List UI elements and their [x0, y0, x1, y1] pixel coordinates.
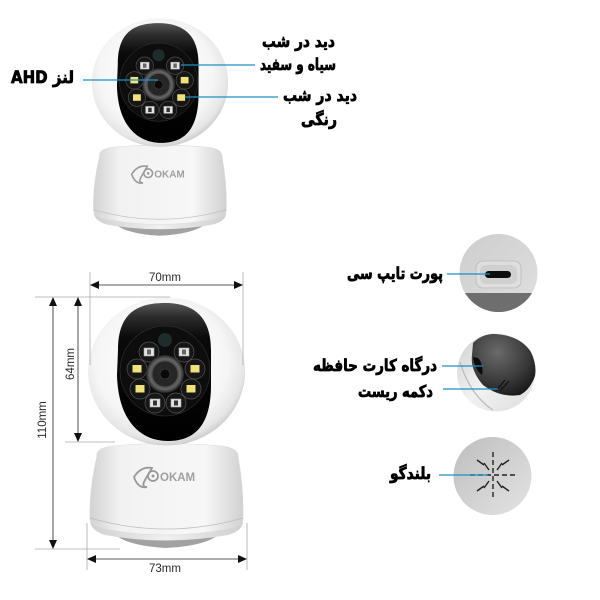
- lens: [146, 355, 184, 393]
- dimension: 73mm width: [87, 523, 247, 575]
- callout: black and white night vision: دید در شب: [262, 32, 335, 51]
- callout: color night vision: دید در شب: [283, 86, 357, 105]
- ball: [88, 298, 245, 446]
- led panel: [120, 43, 198, 121]
- base: [90, 444, 243, 548]
- callout: color night vision: رنگی: [301, 109, 337, 129]
- ball: [92, 18, 228, 147]
- dimension: 64mm height: 64mm: [65, 348, 77, 380]
- dimension: 70mm width: [90, 272, 243, 365]
- callout: AHD lens: لنز AHD: [11, 68, 74, 88]
- base: [93, 145, 226, 236]
- callout: reset button: دکمه ریست: [358, 382, 433, 401]
- callout: color night vision: [185, 86, 357, 129]
- dimension: 64mm height: [65, 297, 115, 442]
- dimension: 110mm height: 110mm: [37, 401, 49, 439]
- callout: reset button: [358, 382, 498, 401]
- callout: black and white night vision: [181, 32, 336, 75]
- callout: USB-C port: پورت تایپ سی: [347, 264, 443, 284]
- detail: memory card slot and reset: [457, 334, 536, 412]
- visor: [117, 23, 199, 143]
- visor: [117, 303, 211, 441]
- detail: speaker: [454, 437, 532, 515]
- callout: speaker: [389, 463, 488, 484]
- logo: OKAM: [154, 170, 185, 181]
- callout: speaker: بلندگو: [389, 463, 431, 484]
- lens: [142, 68, 175, 101]
- callout: black and white night vision: سیاه و سفید: [260, 55, 336, 75]
- callout: memory card slot: درگاه کارت حافظه: [313, 355, 437, 375]
- logo: [132, 166, 185, 183]
- logo: [134, 468, 195, 487]
- dimension: 73mm width: 73mm: [149, 563, 181, 575]
- dimension: 110mm height: [35, 297, 170, 549]
- logo: OKAM: [160, 472, 195, 484]
- dimension: 70mm width: 70mm: [149, 272, 181, 284]
- camera: top view: [92, 18, 228, 236]
- led panel: [120, 326, 210, 416]
- detail: USB-C port: [460, 234, 538, 312]
- camera: dimensioned view: [88, 298, 245, 548]
